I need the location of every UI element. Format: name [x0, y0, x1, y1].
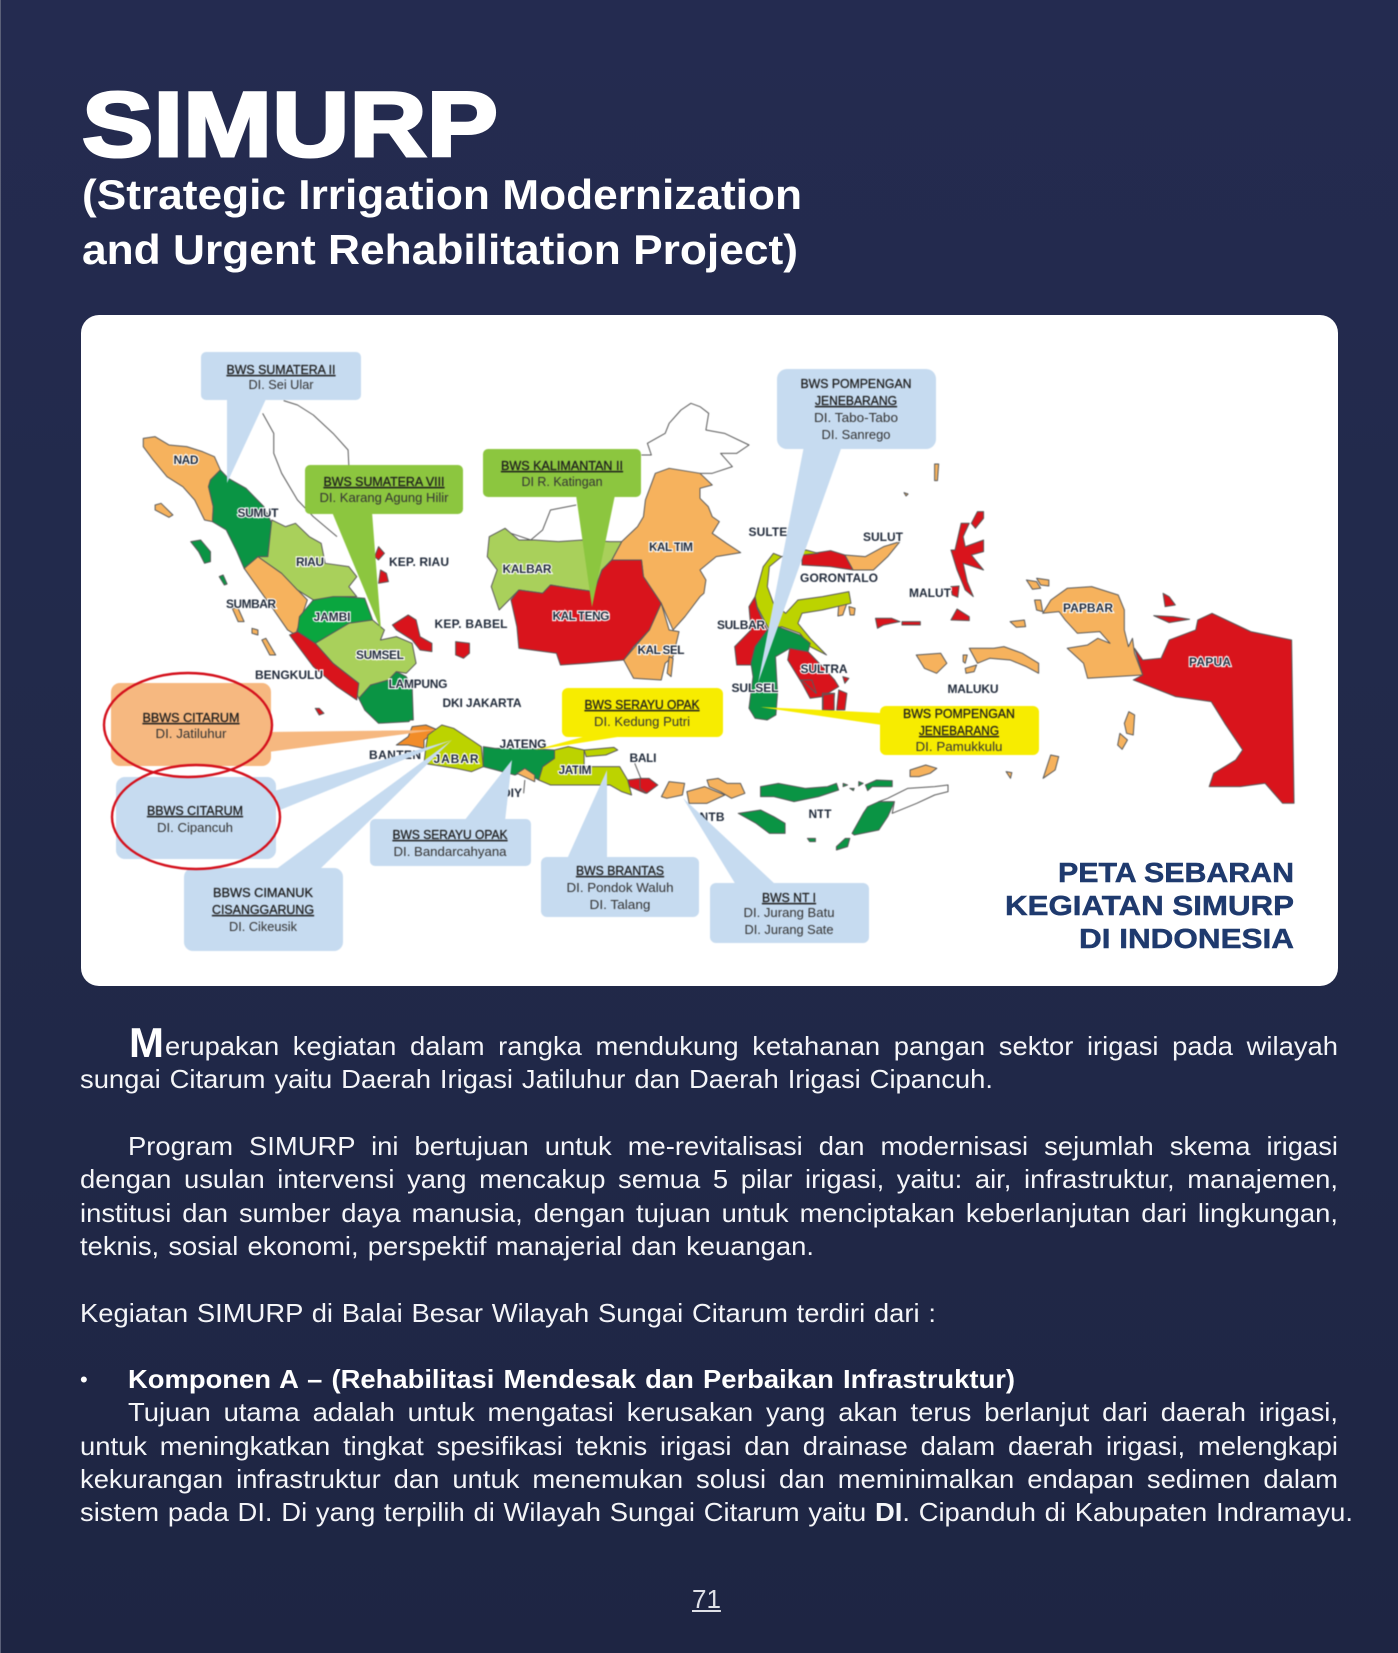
text block: activity intro: Kegiatan SIMURP di Balai Besar Wilayah Sungai Citarum terdiri dari :: [80, 1300, 936, 1328]
highlight ring: Cipancuh: [112, 765, 280, 869]
callout: BWS Brantas: DI. Talang: [590, 898, 651, 912]
map caption: DI INDONESIA: [1079, 923, 1294, 954]
callout: BWS NT I: DI. Jurang Sate: [744, 923, 834, 937]
list item: Komponen A: Tujuan utama adalah untuk mengatasi kerusakan yang akan terus berlanjut dari daerah irigasi,: [128, 1399, 1338, 1427]
province labels: NAD: [174, 453, 199, 467]
province labels: SULUT: [863, 530, 904, 544]
map caption: [1005, 857, 1294, 954]
callout: BBWS Cimanuk Cisanggarung: CISANGGARUNG: [212, 903, 314, 917]
province labels: KAL SEL: [638, 643, 684, 657]
callout: BBWS Citarum (Jatiluhur): DI. Jatiluhur: [156, 727, 226, 741]
callout: BBWS Citarum (Cipancuh): [116, 740, 452, 859]
province labels: LAMPUNG: [388, 677, 448, 691]
province labels: GORONTALO: [800, 571, 878, 585]
callout: BWS Sumatera II: [201, 352, 361, 483]
list item: Komponen A: kekurangan infrastruktur dan untuk menemukan solusi dan meminimalkan endapan sedimen dalam: [80, 1466, 1338, 1494]
province labels: SUMUT: [238, 506, 279, 520]
callout: BWS Serayu Opak (Bandarcahyana): BWS SERAYU OPAK: [392, 828, 508, 842]
callout: BWS Pompengan Jeneberang (Pamukkulu): [760, 706, 1039, 755]
province labels: KAL TIM: [649, 540, 693, 554]
callout: BBWS Cimanuk Cisanggarung: BBWS CIMANUK: [213, 886, 314, 900]
callout: BBWS Citarum (Cipancuh): DI. Cipancuh: [157, 821, 233, 835]
page number: 71: [692, 1584, 721, 1614]
callout: BWS Pompengan Jeneberang (Tabo-Tabo): JENEBARANG: [815, 394, 897, 408]
drop cap M: M: [129, 1019, 164, 1066]
text block: intro paragraph: sungai Citarum yaitu Daerah Irigasi Jatiluhur dan Daerah Irigasi Cipancuh.: [80, 1066, 993, 1094]
callout: BWS Serayu Opak (Kedung Putri): DI. Kedung Putri: [594, 715, 690, 729]
map regions: Sulawesi, Maluku, Papua: [735, 464, 1294, 803]
callout: BWS Kalimantan II: [483, 449, 641, 607]
map regions: Nusa Tenggara and southern islands: [640, 680, 1135, 850]
province labels: BALI: [630, 751, 656, 765]
list heading: Komponen A – (Rehabilitasi Mendesak dan Perbaikan Infrastruktur): [128, 1366, 1015, 1394]
map caption: PETA SEBARAN: [1058, 857, 1294, 888]
province labels: [174, 453, 1231, 824]
callout: BWS Sumatera VIII: BWS SUMATERA VIII: [324, 475, 444, 489]
callout: BWS Serayu Opak (Kedung Putri): BWS SERAYU OPAK: [584, 698, 700, 712]
province labels: SULTRA: [800, 662, 848, 676]
callout: BWS Sumatera VIII: [305, 465, 463, 630]
province labels: NTB: [700, 810, 725, 824]
province labels: BANTEN: [369, 748, 421, 762]
callout: BWS Sumatera VIII: DI. Karang Agung Hilir: [320, 491, 448, 505]
callout: BWS Serayu Opak (Bandarcahyana): [370, 760, 531, 866]
callout: BBWS Cimanuk Cisanggarung: [184, 740, 452, 951]
title: SIMURP: [82, 74, 802, 273]
callout: BWS Serayu Opak (Bandarcahyana): DI. Bandarcahyana: [394, 845, 507, 859]
callout: BWS Brantas: DI. Pondok Waluh: [566, 881, 674, 895]
text block: intro paragraph: [80, 1019, 1338, 1094]
province labels: JABAR: [434, 752, 479, 766]
province labels: SULSEL: [732, 681, 778, 695]
highlight ring: Jatiluhur: [104, 673, 272, 777]
callout: BWS Pompengan Jeneberang (Tabo-Tabo): DI. Tabo-Tabo: [814, 411, 898, 425]
callout: BWS Pompengan Jeneberang (Tabo-Tabo): [758, 369, 936, 683]
province labels: KAL TENG: [552, 609, 610, 623]
callout: BWS NT I: DI. Jurang Batu: [744, 906, 835, 920]
province labels: NTT: [808, 807, 832, 821]
callout: BWS Pompengan Jeneberang (Tabo-Tabo): DI. Sanrego: [822, 428, 891, 442]
province labels: SULBAR: [717, 618, 765, 632]
province labels: PAPUA: [1189, 655, 1231, 669]
province labels: MALUT: [909, 586, 952, 600]
callout: BBWS Citarum (Jatiluhur): [111, 683, 436, 766]
callout: BWS Pompengan Jeneberang (Pamukkulu): DI. Pamukkulu: [916, 740, 1003, 754]
callout: BBWS Citarum (Jatiluhur): BBWS CITARUM: [142, 711, 240, 725]
text block: program paragraph: teknis, sosial ekonomi, perspektif manajerial dan keuangan.: [80, 1233, 814, 1261]
province labels: SUMSEL: [356, 648, 404, 662]
province labels: DKI JAKARTA: [442, 696, 522, 710]
province labels: JAMBI: [314, 610, 350, 624]
province labels: DIY: [502, 786, 522, 800]
callout: BWS Sumatera II: DI. Sei Ular: [248, 378, 314, 392]
callout: BWS Brantas: [541, 770, 699, 917]
callout: BWS Pompengan Jeneberang (Pamukkulu): BWS POMPENGAN: [903, 707, 1015, 721]
province labels: JATENG: [500, 737, 546, 751]
subtitle line 2: and Urgent Rehabilitation Project): [82, 226, 798, 273]
callout: BWS Sumatera II: BWS SUMATERA II: [226, 363, 336, 377]
text block: program paragraph: [80, 1133, 1338, 1261]
callout: BWS NT I: BWS NT I: [762, 891, 816, 905]
panel: map card: [81, 315, 1338, 986]
callout: BWS Pompengan Jeneberang (Tabo-Tabo): BWS POMPENGAN: [800, 377, 912, 391]
province labels: KEP. BABEL: [434, 617, 508, 631]
callout: BBWS Cimanuk Cisanggarung: DI. Cikeusik: [229, 920, 298, 934]
province labels: RIAU: [296, 555, 324, 569]
text block: intro paragraph: erupakan kegiatan dalam rangka mendukung ketahanan pangan sektor irigasi pada wilayah: [165, 1033, 1338, 1061]
province labels: SULTENG: [748, 525, 806, 539]
province labels: MALUKU: [948, 682, 998, 696]
callout: BWS Kalimantan II: DI R. Katingan: [522, 475, 603, 489]
callout: BWS Pompengan Jeneberang (Pamukkulu): JENEBARANG: [919, 724, 999, 738]
list item: Komponen A: untuk meningkatkan tingkat spesifikasi teknis irigasi dan drainase dalam daerah irigasi, melengkapi: [80, 1433, 1338, 1461]
map caption: KEGIATAN SIMURP: [1005, 890, 1294, 921]
callout: BWS NT I: [683, 798, 869, 943]
subtitle line 1: (Strategic Irrigation Modernization: [82, 171, 802, 218]
title: SIMURP: SIMURP: [82, 74, 498, 176]
province labels: BENGKULU: [255, 668, 323, 682]
callout: BWS Serayu Opak (Kedung Putri): [535, 688, 723, 750]
callout: BBWS Citarum (Cipancuh): BBWS CITARUM: [147, 804, 243, 818]
province labels: KALBAR: [502, 562, 552, 576]
province labels: KEP. RIAU: [389, 555, 449, 569]
map regions: Java and Bali: [315, 708, 657, 795]
map of Indonesia: [102, 352, 1296, 952]
bullet: •: [80, 1367, 88, 1392]
text block: program paragraph: Program SIMURP ini bertujuan untuk me-revitalisasi dan modernisasi sejumlah skema irigasi: [128, 1133, 1338, 1161]
callout: BWS Kalimantan II: BWS KALIMANTAN II: [501, 459, 623, 473]
province labels: SUMBAR: [226, 597, 276, 611]
list item: Komponen A: [80, 1366, 1353, 1527]
callout: BWS Brantas: BWS BRANTAS: [576, 864, 664, 878]
province labels: PAPBAR: [1063, 601, 1113, 615]
text block: program paragraph: dengan usulan intervensi yang mencakup semua 5 pilar irigasi, yaitu: air, infrastruktur, manajemen,: [80, 1166, 1338, 1194]
province labels: JATIM: [558, 763, 592, 777]
text block: program paragraph: institusi dan sumber daya manusia, dengan tujuan untuk menciptakan keberlanjutan dari lingkungan,: [80, 1200, 1338, 1228]
map regions: Sumatra, Kalimantan: [143, 401, 749, 723]
list item: Komponen A: sistem pada DI. Di yang terpilih di Wilayah Sungai Citarum yaitu DI. Cipanduh di Kabupaten Indramayu.: [80, 1499, 1353, 1527]
